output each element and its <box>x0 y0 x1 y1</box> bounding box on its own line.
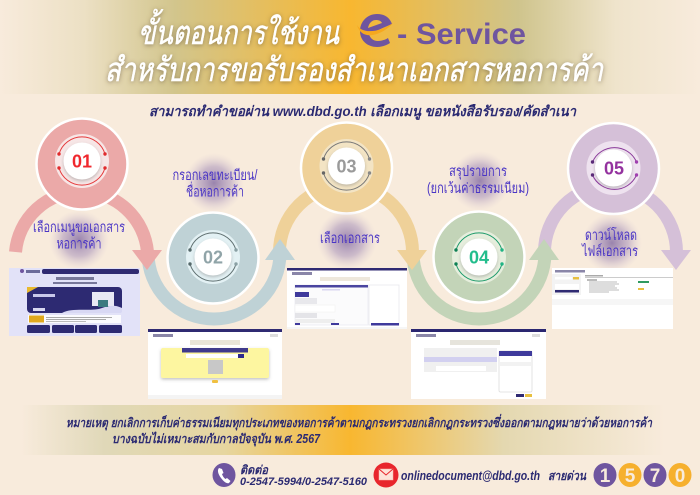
title <box>105 9 604 88</box>
arrow: step 4 <box>413 239 559 319</box>
contact email: onlinedocument@dbd.go.th <box>401 468 540 483</box>
label: step 1: หอการค้า <box>56 236 102 252</box>
label: step 2: กรอกเลขทะเบียน/ <box>172 167 258 184</box>
step 5 badge <box>568 123 659 214</box>
note band <box>0 405 700 455</box>
hotline 1570: 0 <box>675 466 685 487</box>
label: step 5: ไฟล์เอกสาร <box>581 242 638 260</box>
logo: e-Service: - Service <box>397 18 526 51</box>
hotline label: สายด่วน <box>548 469 587 483</box>
hotline 1570: 5 <box>625 466 636 487</box>
label: step 3 <box>317 210 380 270</box>
subtitle: สามารถทำคำขอผ่าน www.dbd.go.th เลือกเมนู ขอหนังสือรับรอง/คัดสำเนา <box>149 103 577 120</box>
icon: email <box>374 462 398 488</box>
hotline 1570: 1 <box>600 466 611 487</box>
hotline 1570 <box>594 463 692 487</box>
label: step 4 <box>427 151 529 211</box>
arrow: step 3 <box>280 186 427 270</box>
step 2 badge <box>168 212 258 304</box>
contact phone: ติดต่อ <box>240 463 269 477</box>
label: step 5 <box>581 213 642 273</box>
step 5 badge: 05 <box>604 158 624 178</box>
logo: e-Service <box>357 14 526 51</box>
contact phone <box>240 463 368 488</box>
step 2 badge: 02 <box>203 248 223 268</box>
note text <box>66 413 653 447</box>
contact phone: 0-2547-5994/0-2547-5160 <box>240 476 368 488</box>
label: step 3: เลือกเอกสาร <box>320 230 380 247</box>
label: step 2 <box>172 153 258 213</box>
step 1 badge: 01 <box>72 152 92 172</box>
label: step 2: ชื่อหอการค้า <box>186 182 244 200</box>
label: step 1: เลือกเมนูขอเอกสาร <box>33 219 125 236</box>
icon: phone <box>212 463 236 487</box>
step 3 badge <box>301 122 392 214</box>
screenshot: step 5 download page <box>552 268 673 329</box>
label: step 1 <box>33 210 125 270</box>
screenshot: step 3 document selection <box>287 268 407 329</box>
label: step 4: สรุปรายการ <box>449 164 507 180</box>
step 4 badge <box>434 212 524 302</box>
arrow: step 5 <box>544 186 691 270</box>
label: step 4: (ยกเว้นค่าธรรมเนียม) <box>427 180 529 197</box>
label: step 5: ดาวน์โหลด <box>585 226 637 244</box>
screenshot: step 1 home page <box>9 268 140 336</box>
arrow: step 2 <box>148 239 295 319</box>
step 3 badge: 03 <box>336 156 357 176</box>
step 4 badge: 04 <box>469 248 489 268</box>
screenshot: step 2 search page <box>148 329 282 399</box>
hotline 1570: 7 <box>650 466 660 487</box>
arrow: step 1 <box>16 191 162 270</box>
note text: บางฉบับไม่เหมาะสมกับกาลปัจจุบัน พ.ศ. 2567 <box>112 431 321 447</box>
step 1 badge <box>36 118 128 210</box>
screenshot: step 4 summary <box>411 329 546 399</box>
header band <box>0 0 700 94</box>
title: ขั้นตอนการใช้งาน <box>138 9 340 51</box>
